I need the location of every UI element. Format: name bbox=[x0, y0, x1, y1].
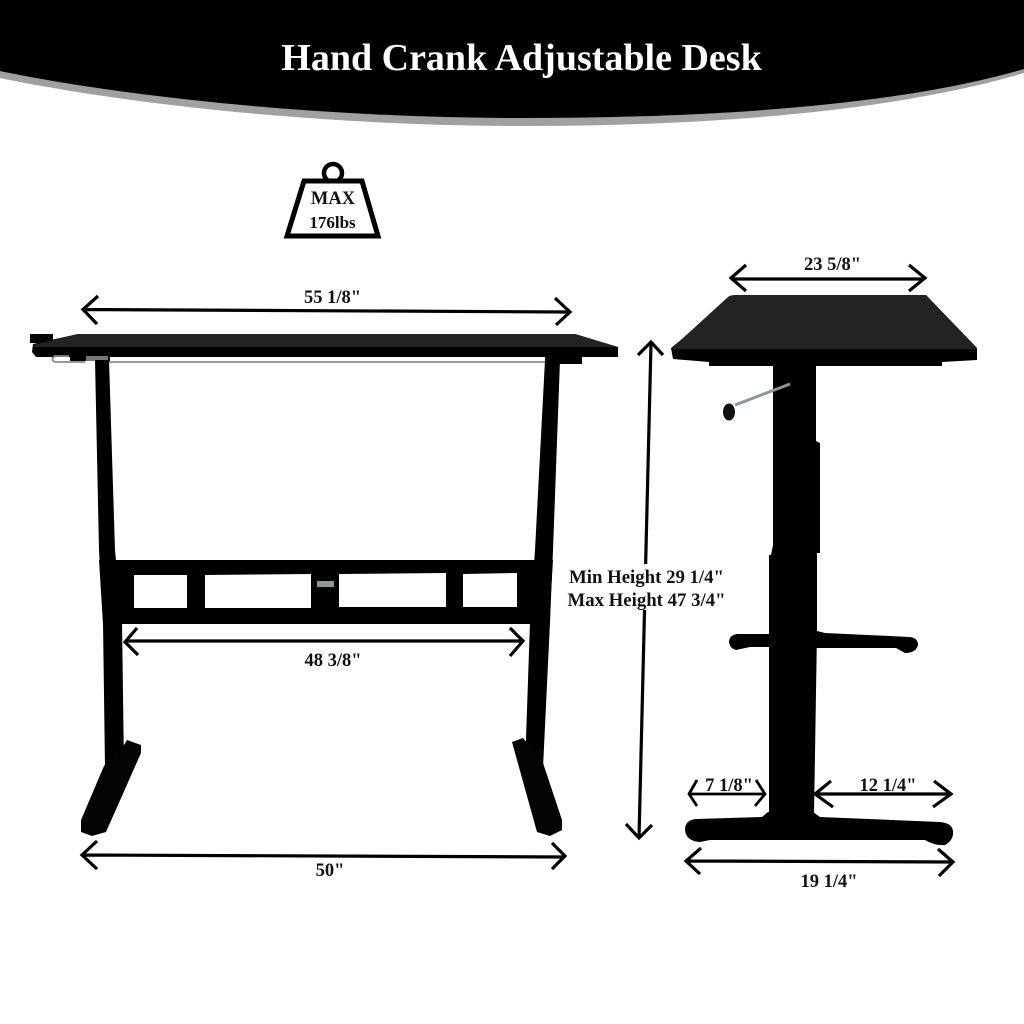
dimension: 19 1/4: 19 1/4" bbox=[800, 872, 858, 892]
icon: max weight 176lbs: MAX bbox=[311, 189, 356, 209]
dimension: height bbox=[626, 342, 663, 838]
base foot bbox=[685, 812, 953, 845]
upper column bbox=[773, 366, 820, 553]
height labels: Max Height 47 3/4" bbox=[567, 590, 726, 611]
dimension: 55 1/8: 55 1/8" bbox=[304, 288, 361, 308]
title: Hand Crank Adjustable Desk bbox=[281, 37, 763, 79]
height labels bbox=[566, 564, 728, 611]
left leg bbox=[95, 360, 124, 768]
crossbeam foot bbox=[729, 631, 918, 653]
dimension: 23 5/8 bbox=[731, 255, 925, 291]
dimension: 48 3/8 bbox=[125, 628, 523, 671]
dimension: 50 bbox=[82, 841, 565, 881]
dimension: 12 1/4 bbox=[815, 776, 951, 807]
left foot bbox=[81, 740, 141, 836]
dimension: 50: 50" bbox=[316, 861, 344, 881]
crossbar with cutouts bbox=[99, 560, 553, 624]
crank handle bbox=[723, 384, 790, 420]
desktop side view bbox=[671, 295, 977, 366]
crossbar label bbox=[317, 581, 334, 587]
right foot bbox=[512, 738, 562, 836]
front view desk bbox=[30, 334, 618, 836]
dimension: 48 3/8: 48 3/8" bbox=[304, 651, 362, 671]
right leg bbox=[525, 360, 560, 768]
side view desk bbox=[671, 295, 977, 845]
dimension: 12 1/4: 12 1/4" bbox=[859, 776, 917, 796]
dimension: 7 1/8: 7 1/8" bbox=[705, 776, 753, 796]
height labels: Min Height 29 1/4" bbox=[569, 567, 724, 588]
dimension: 23 5/8: 23 5/8" bbox=[804, 255, 861, 275]
dimension: 7 1/8 bbox=[689, 776, 765, 806]
dimension: 55 1/8 bbox=[83, 288, 570, 325]
icon: max weight 176lbs: 176lbs bbox=[309, 213, 356, 232]
icon: max weight 176lbs bbox=[287, 164, 378, 236]
dimension: 19 1/4 bbox=[686, 848, 953, 892]
desktop front view bbox=[30, 334, 618, 364]
header banner bbox=[0, 0, 1024, 126]
lower column bbox=[769, 555, 817, 815]
